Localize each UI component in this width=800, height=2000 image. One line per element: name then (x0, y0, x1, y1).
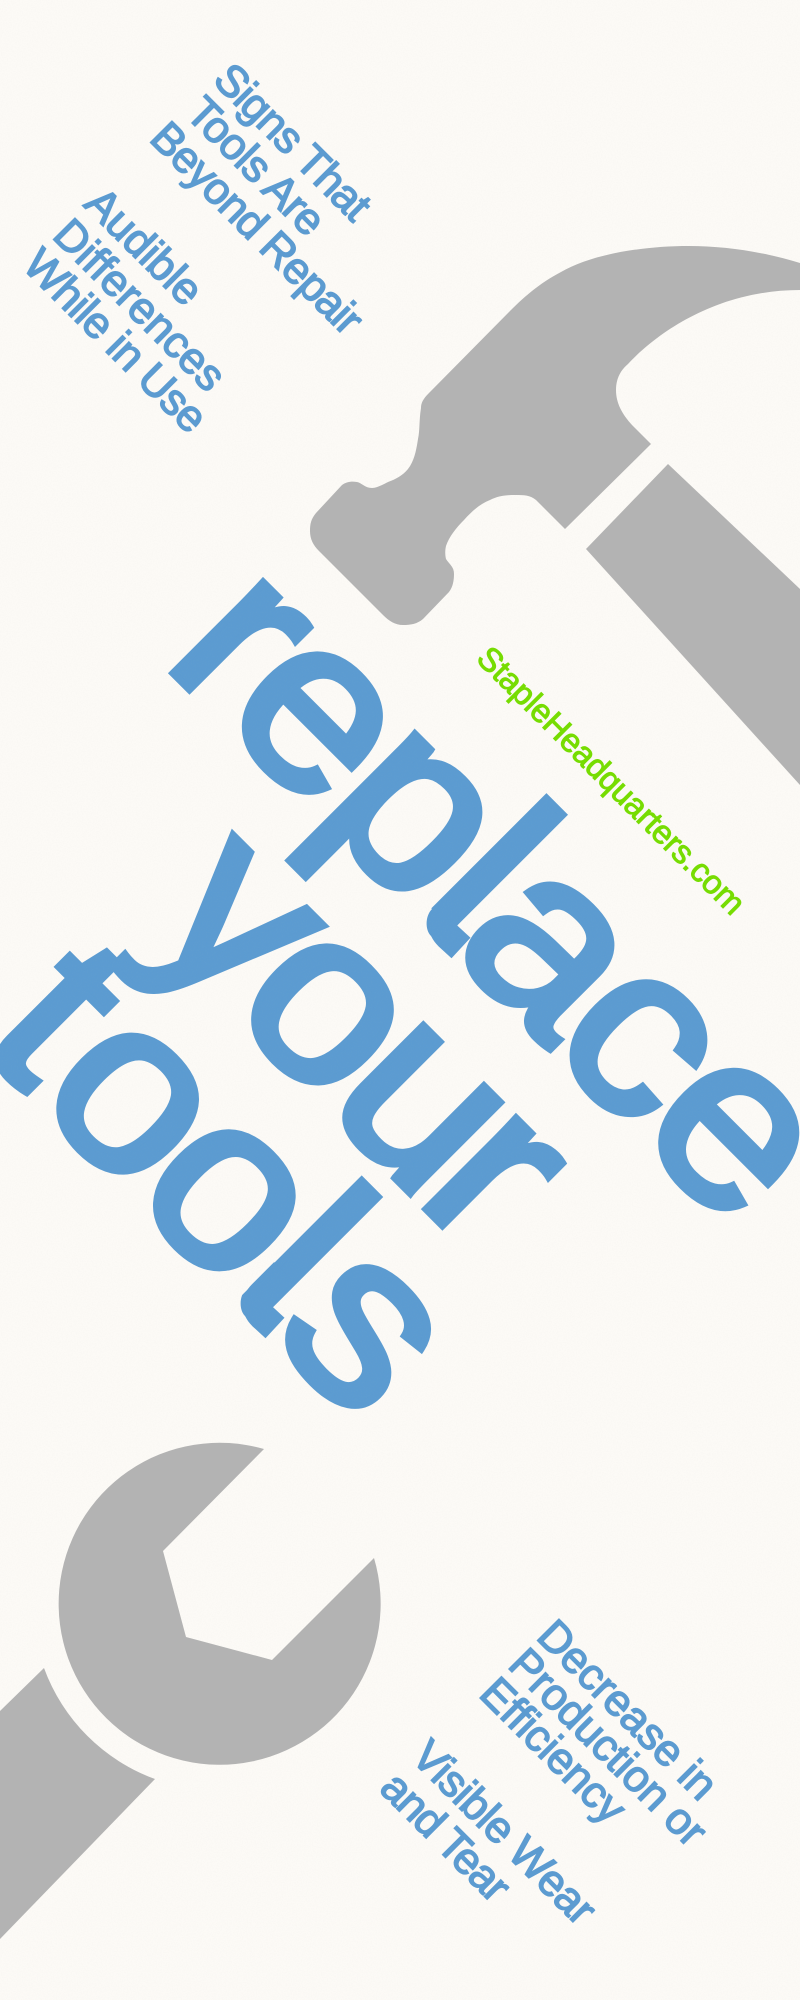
text block: visible wear and tear: and Tear (371, 1762, 520, 1911)
wrench head (59, 1443, 381, 1765)
heading: signs that tools are beyond repair: Beyond Repair (141, 112, 372, 344)
text block: visible wear and tear: Visible Wear (402, 1731, 606, 1934)
hammer head (310, 246, 800, 625)
hook on the l of replace (443, 892, 470, 948)
hook on the l of tools (257, 1272, 284, 1328)
heading: signs that tools are beyond repair: Tools Are (177, 87, 334, 245)
title: replace your tools (0, 506, 800, 1463)
text block: audible differences while in use: While in Use (14, 239, 216, 442)
text block: audible differences while in use: Audible (75, 178, 212, 315)
icon: wrench (0, 1443, 381, 1939)
icon: hammer (310, 246, 800, 785)
hammer handle (586, 464, 800, 785)
text block: audible differences while in use: Differences (44, 209, 235, 401)
website url: StapleHeadquarters.com (470, 639, 753, 922)
text block: decrease in production or efficiency: Production or (499, 1639, 716, 1856)
title line: your: your (106, 770, 629, 1294)
text block: decrease in production or efficiency: Efficiency (470, 1668, 636, 1833)
text block: decrease in production or efficiency: Decrease in (528, 1610, 727, 1810)
wrench handle (0, 1668, 155, 1939)
heading: signs that tools are beyond repair: Signs That (204, 54, 381, 230)
